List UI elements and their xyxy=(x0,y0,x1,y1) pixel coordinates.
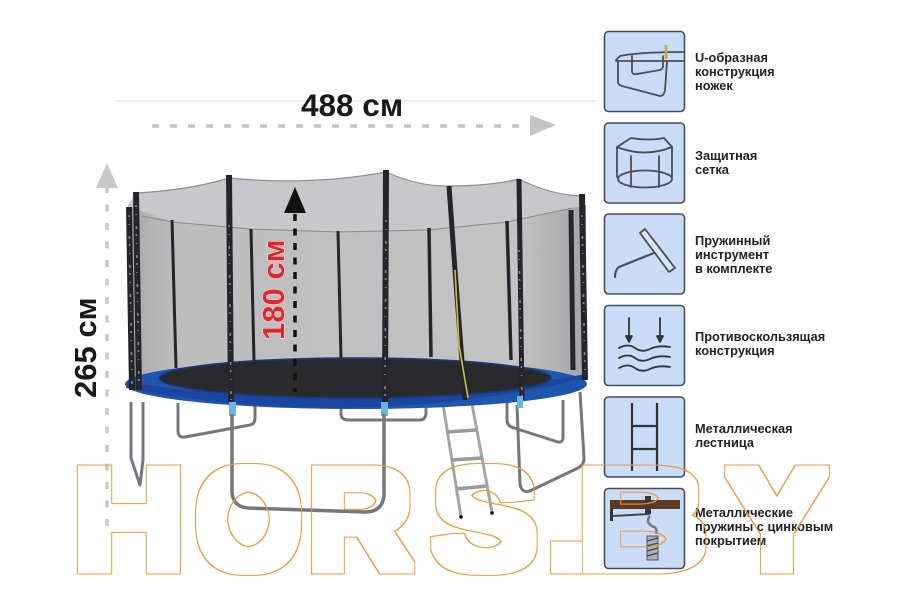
icon: ladder xyxy=(632,403,657,471)
watermark xyxy=(73,440,826,599)
watermark: S xyxy=(432,440,537,598)
label: в комплекте xyxy=(695,261,772,276)
feature: anti-slip xyxy=(604,306,825,386)
label: покрытием xyxy=(695,533,766,548)
height label: 265 см xyxy=(68,297,103,398)
trampoline photo xyxy=(125,170,587,519)
watermark: Y xyxy=(728,442,826,598)
watermark: O xyxy=(196,441,301,599)
net poles xyxy=(129,170,585,403)
safety net xyxy=(128,172,586,385)
label: Противоскользящая xyxy=(695,329,825,344)
label: конструкция xyxy=(695,343,775,358)
pad shading xyxy=(126,374,587,408)
label: конструкция xyxy=(695,64,775,79)
feature: safety net xyxy=(604,123,757,203)
label: Защитная xyxy=(695,148,757,163)
watermark: H xyxy=(73,441,185,598)
feature: spring tool xyxy=(604,214,772,294)
label: инструмент xyxy=(695,247,769,262)
label: Металлические xyxy=(695,505,793,520)
front legs xyxy=(229,396,523,512)
icon: T tool xyxy=(615,229,675,277)
height arrow xyxy=(96,163,118,530)
watermark: . xyxy=(547,440,586,598)
icon: U leg xyxy=(616,46,684,96)
label: сетка xyxy=(695,162,730,177)
icon: arrows and waves xyxy=(619,318,670,371)
label: Пружинный xyxy=(695,233,770,248)
icon: net xyxy=(617,138,672,188)
feature: metal ladder xyxy=(604,397,793,477)
watermark: R xyxy=(308,441,412,599)
feature: U-shaped legs xyxy=(604,32,775,112)
label: лестница xyxy=(695,435,755,450)
width label: 488 см xyxy=(301,87,403,123)
ladder xyxy=(443,404,494,519)
label: U-образная xyxy=(695,50,768,65)
back and small legs xyxy=(131,392,584,492)
net height label: 180 см xyxy=(256,239,291,340)
watermark: B xyxy=(576,440,708,598)
icon: spring xyxy=(610,496,680,560)
blue pad ring xyxy=(125,359,587,409)
width guide line xyxy=(115,100,597,102)
jump mat xyxy=(159,358,551,398)
net height arrow xyxy=(284,187,306,392)
label: пружины с цинковым xyxy=(695,519,833,534)
width arrow xyxy=(152,115,556,136)
feature: galvanized springs xyxy=(604,488,833,568)
label: ножек xyxy=(695,78,733,93)
label: Металлическая xyxy=(695,421,793,436)
